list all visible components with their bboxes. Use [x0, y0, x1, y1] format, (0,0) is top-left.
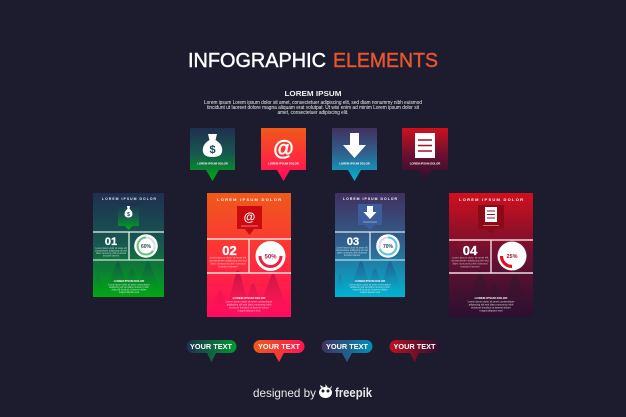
caption: LOREM IPSUM DOLOR [233, 296, 266, 300]
speech pill: red [390, 340, 441, 362]
speech pill: blue: YOUR TEXT [326, 344, 369, 351]
intro text block [204, 89, 422, 116]
mini icon tile: $ [127, 212, 130, 218]
caption [108, 279, 150, 294]
mountains [212, 270, 287, 308]
title: INFOGRAPHIC [188, 49, 326, 72]
text block: diam nonummy nibh euismod [337, 252, 368, 254]
caption: euismod tincidunt ut laoreet dolore [229, 306, 269, 310]
caption [468, 296, 515, 312]
card heading: LOREM IPSUM DOLOR [343, 197, 398, 201]
mountains [335, 261, 402, 290]
text block: consectetuer adipiscing elit sed [209, 258, 247, 262]
icon tile: down arrow: LOREM IPSUM DOLOR [339, 162, 370, 166]
text block [209, 256, 247, 268]
speech pill: red: YOUR TEXT [394, 344, 436, 351]
text block [451, 256, 489, 268]
dividers [335, 231, 405, 233]
text block [336, 246, 369, 257]
caption: LOREM IPSUM DOLOR [475, 296, 508, 300]
speech pill: green: YOUR TEXT [190, 344, 233, 351]
caption: euismod tincidunt ut laoreet dolore [352, 288, 388, 292]
text block [95, 247, 128, 258]
text block: diam nonummy nibh euismod [452, 262, 488, 266]
mountains [93, 261, 160, 290]
dividers [93, 231, 164, 233]
icon: money bag: $ [209, 144, 216, 156]
text block: consectetuer adipiscing elit sed [451, 258, 489, 262]
speech pill: orange [254, 340, 305, 362]
donut 60%: 60% [141, 244, 152, 250]
icon tile: down arrow [332, 128, 377, 181]
caption: magna aliquam erat [360, 291, 381, 294]
text block: Lorem ipsum dolor sit amet elit [452, 256, 489, 260]
caption: Lorem ipsum dolor sit amet consectetuer [468, 300, 515, 304]
icon: down arrow [343, 133, 366, 158]
text block: diam nonummy nibh euismod [96, 253, 127, 255]
number 01: 01 [105, 236, 117, 248]
caption [226, 296, 273, 312]
icon: at sign: @ [273, 138, 294, 160]
caption: LOREM IPSUM DOLOR [355, 279, 385, 283]
caption [349, 279, 391, 294]
text block: tincidunt laoreet [103, 254, 119, 258]
caption: euismod tincidunt ut laoreet dolore [111, 288, 147, 292]
donut 70%: 70% [383, 244, 394, 250]
title: ELEMENTS [333, 49, 438, 72]
number 02: 02 [222, 243, 237, 258]
panel: card 01 [93, 193, 164, 297]
icon: freepik mascot [319, 384, 332, 398]
caption: magna aliquam erat [480, 308, 503, 312]
caption: euismod tincidunt ut laoreet dolore [471, 306, 511, 310]
mini icon tile [478, 205, 504, 234]
caption: Lorem ipsum dolor sit amet consectetuer [349, 284, 391, 286]
caption: Lorem ipsum dolor sit amet consectetuer [108, 284, 150, 286]
dividers [207, 238, 291, 240]
icon: document [415, 133, 435, 158]
caption: LOREM IPSUM DOLOR [114, 279, 144, 283]
card heading: LOREM IPSUM DOLOR [102, 197, 157, 201]
text block: tincidunt laoreet [219, 264, 238, 268]
mountains [454, 270, 529, 308]
number 04: 04 [463, 243, 478, 258]
caption: Lorem ipsum dolor sit amet consectetuer [226, 300, 273, 304]
text block: diam nonummy nibh euismod [210, 262, 246, 266]
text block: consectetuer adipiscing elit sed [336, 249, 369, 252]
intro text block: amet, consectetuer adipiscing elit. [278, 110, 348, 116]
caption: magna aliquam erat [119, 291, 140, 294]
icon tile: money bag: LOREM IPSUM DOLOR [197, 162, 228, 166]
text block: tincidunt laoreet [461, 264, 480, 268]
mini icon tile: @ [244, 210, 255, 224]
text block: Lorem ipsum dolor sit amet elit [95, 247, 127, 250]
speech pill: orange: YOUR TEXT [258, 344, 301, 351]
text block: consectetuer adipiscing elit sed [95, 250, 128, 252]
icon tile: document [402, 128, 448, 181]
panel: card 02 [207, 193, 291, 317]
attribution: designed by [253, 386, 316, 400]
number 03: 03 [347, 236, 359, 248]
caption: adipiscing elit sed diam nonummy nibh [109, 286, 149, 289]
caption: magna aliquam erat [238, 308, 261, 312]
text block: Lorem ipsum dolor sit amet elit [210, 256, 247, 260]
intro text block: tincidunt ut laoreet dolore magna aliquam erat volutpat. Ut wisi enim ad minim Lorem ipsum dolor sit [207, 105, 420, 111]
mini icon tile [358, 204, 382, 230]
title [188, 49, 438, 72]
intro text block: Lorem ipsum Lorem ipsum dolor sit amet, consectetuer adipiscing elit, sed diam nonummy nibh euismod [204, 100, 422, 106]
card heading: LOREM IPSUM DOLOR [459, 197, 523, 202]
text block: tincidunt laoreet [344, 254, 360, 257]
caption: adipiscing elit sed diam nonummy nibh [469, 302, 514, 306]
attribution [253, 384, 372, 400]
speech pill: green [186, 340, 237, 362]
panel: card 04 [449, 193, 533, 317]
donut 25%: 25% [506, 254, 518, 260]
icon tile: money bag [190, 128, 235, 181]
panel: card 03 [335, 193, 405, 297]
dividers [449, 239, 533, 241]
donut 50%: 50% [264, 254, 277, 260]
card heading: LOREM IPSUM DOLOR [217, 197, 281, 202]
intro text block: LOREM IPSUM [284, 89, 342, 98]
speech pill: blue [322, 340, 372, 362]
text block: Lorem ipsum dolor sit amet elit [336, 246, 368, 250]
icon tile: at sign [261, 128, 306, 181]
icon tile: document: LOREM IPSUM DOLOR [410, 162, 440, 166]
caption: adipiscing elit sed diam nonummy nibh [350, 286, 390, 289]
icon tile: at sign: LOREM IPSUM DOLOR [268, 162, 299, 166]
caption: adipiscing elit sed diam nonummy nibh [227, 302, 272, 306]
attribution: freepik [335, 386, 372, 400]
